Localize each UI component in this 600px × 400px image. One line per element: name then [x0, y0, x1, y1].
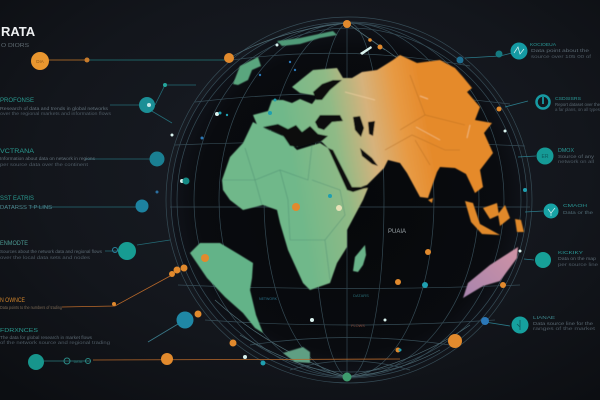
asia light streaks: [345, 92, 470, 140]
lower converging lines: [215, 23, 470, 377]
left label 6: FDRXNCES: [0, 328, 38, 334]
ocean labels: FLOWS: [351, 324, 365, 328]
right node 2 with label: CSDSISRS: [555, 96, 581, 101]
left teal nodes: [28, 83, 194, 370]
greenland: [233, 57, 261, 85]
right node 1 with label: source over 105 00 of: [531, 54, 592, 59]
left label 6: of the network source and regional trading: [0, 340, 111, 345]
right node 3 with label: [536, 148, 595, 164]
cyan data points: [156, 56, 527, 366]
left label 3: [0, 196, 53, 211]
header: [1, 24, 36, 49]
indonesia islands: [428, 198, 524, 235]
left label 4: [0, 241, 103, 260]
center label: PUAIA: [388, 229, 406, 235]
right connectors: [465, 53, 543, 326]
seas: [263, 80, 378, 192]
right node 6 with label: [512, 315, 596, 334]
right node 3 with label: ER: [542, 154, 549, 160]
country borders: [222, 145, 345, 280]
right node 1 with label: KOCIOEUA: [530, 42, 556, 47]
arctic strip: [277, 31, 337, 46]
left label 4: over the local data sets and nodes: [0, 255, 91, 260]
bright data points: [170, 44, 522, 359]
left node: orange badge: [31, 52, 90, 70]
globe: [166, 17, 532, 383]
left label 1: [0, 98, 112, 116]
left node: orange badge: DIA: [36, 59, 44, 64]
Eurasia landmass: [253, 55, 493, 198]
left label 4: Sources about the network data and regional flows: [0, 249, 103, 254]
left teal nodes: DATA: [74, 360, 83, 364]
right node 3 with label: DMOX: [558, 148, 575, 154]
left label 3: DATARSS T P LINS: [0, 205, 53, 211]
top left connector: [47, 59, 87, 61]
right node 3 with label: Source of any: [558, 154, 595, 159]
orange lower left connector: [62, 275, 172, 307]
left label 2: Information about data on network in regions: [0, 156, 96, 161]
right node 5 with label: [535, 250, 599, 268]
right node 1 with label: Data point about the: [531, 48, 590, 53]
ocean labels: [259, 293, 369, 328]
asia borders: [385, 75, 465, 165]
ocean labels: NETWORK: [259, 297, 278, 301]
right node 1 with label: [496, 42, 592, 60]
right node 6 with label: Data source line for the: [533, 321, 594, 326]
south america: [190, 243, 263, 333]
right node 2 with label: a far plans, on all types: [555, 107, 600, 112]
left label 5: Data points to the numbers of trading: [0, 305, 62, 310]
south pole node: [342, 372, 352, 382]
continents: [190, 31, 524, 363]
left label 3: SST EATRIS: [0, 196, 34, 202]
right node 4 with label: Data or the: [563, 210, 594, 215]
right node 2 with label: Report dataset over the: [555, 102, 600, 107]
left label 2: per source data over the continent: [0, 162, 89, 167]
right node 6 with label: LIANAE: [533, 315, 555, 320]
right node 3 with label: network on all: [558, 159, 594, 164]
left label 1: Research of data and trends in global networks: [0, 106, 109, 111]
orange nodes: [112, 20, 506, 365]
left label 6: The data for global research in market flows: [0, 335, 93, 340]
right node 4 with label: [544, 203, 594, 218]
left label 1: PROFONSE: [0, 98, 34, 104]
left label 2: VCTRANA: [0, 149, 34, 155]
globe sphere: [171, 22, 527, 378]
left label 2: [0, 149, 96, 167]
left label 4: ENMODTE: [0, 241, 28, 247]
left label 5: N OWNCE: [0, 298, 25, 304]
right node 4 with label: CMAOH: [563, 203, 587, 208]
right node 6 with label: ranges of the market: [533, 326, 596, 331]
right node 5 with label: Data on the map: [558, 256, 597, 261]
australia: [463, 247, 518, 298]
madagascar: [353, 245, 366, 272]
right node 2 with label: [536, 96, 600, 112]
southern tip land: [283, 347, 310, 363]
right node 5 with label: KICKIKY: [558, 250, 583, 255]
graticule lines: [166, 17, 532, 383]
right node 5 with label: per source line: [558, 262, 599, 267]
left label 6: [0, 328, 111, 345]
data connectors: [30, 53, 543, 361]
subtitle: O DIORS: [1, 43, 29, 49]
title: RATA: [1, 24, 36, 39]
ocean labels: DATARS: [353, 293, 369, 298]
Africa: [222, 122, 368, 290]
left label 5: [0, 298, 62, 310]
left label 1: over the regional markets and information flows: [0, 111, 112, 116]
